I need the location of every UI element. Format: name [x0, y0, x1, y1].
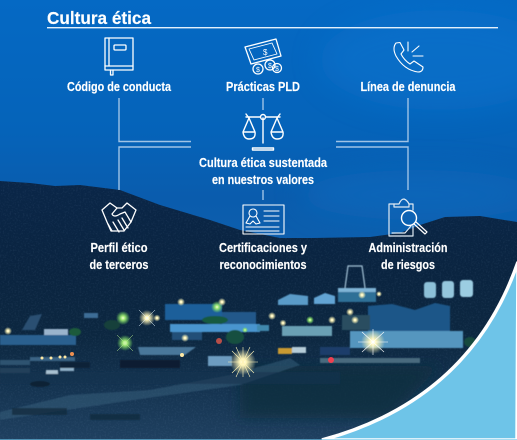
icon: handshake	[102, 203, 136, 232]
background: mine landscape photo	[0, 181, 517, 440]
icon: whistleblower phone	[394, 42, 423, 72]
label: Administración de riesgos: de riesgos	[381, 257, 435, 272]
icon: PLD banknote and coins: $	[256, 67, 260, 74]
label: Perfil ético de terceros: de terceros	[90, 257, 148, 272]
label: central value statement	[199, 155, 328, 187]
icon: scales of justice	[243, 114, 283, 150]
icon: risk clipboard and magnifier	[389, 199, 427, 236]
icon: code of conduct book	[105, 38, 133, 75]
corner: light blue curved panel	[322, 262, 517, 440]
lights	[230, 349, 256, 375]
title rule	[47, 27, 498, 28]
label: central value statement: Cultura ética sustentada	[199, 155, 328, 170]
label: Perfil ético de terceros	[90, 240, 148, 272]
label: Código de conducta: Código de conducta	[67, 79, 172, 94]
label: Certificaciones y reconocimientos: Certificaciones y	[219, 240, 308, 255]
label: Línea de denuncia: Línea de denuncia	[360, 79, 456, 94]
connector lines	[119, 98, 408, 200]
label: Certificaciones y reconocimientos	[219, 240, 308, 272]
label: Administración de riesgos: Administración	[368, 240, 448, 255]
icon: PLD banknote and coins: $	[275, 66, 279, 73]
label: central value statement: en nuestros valores	[212, 172, 314, 187]
icon: PLD banknote and coins: $	[268, 63, 272, 70]
label: Administración de riesgos	[368, 240, 448, 272]
dark scrub in the lower right	[240, 366, 440, 418]
label: Prácticas PLD: Prácticas PLD	[226, 79, 300, 94]
icon: certificate	[243, 205, 284, 234]
icon: PLD banknote and coins: $	[263, 48, 268, 57]
label: Perfil ético de terceros: Perfil ético	[90, 240, 148, 255]
icon: PLD banknote and coins	[245, 39, 282, 74]
buildings	[0, 335, 76, 345]
label: Certificaciones y reconocimientos: reconocimientos	[220, 257, 306, 272]
title: Cultura ética	[47, 8, 151, 28]
ground details	[0, 266, 476, 420]
